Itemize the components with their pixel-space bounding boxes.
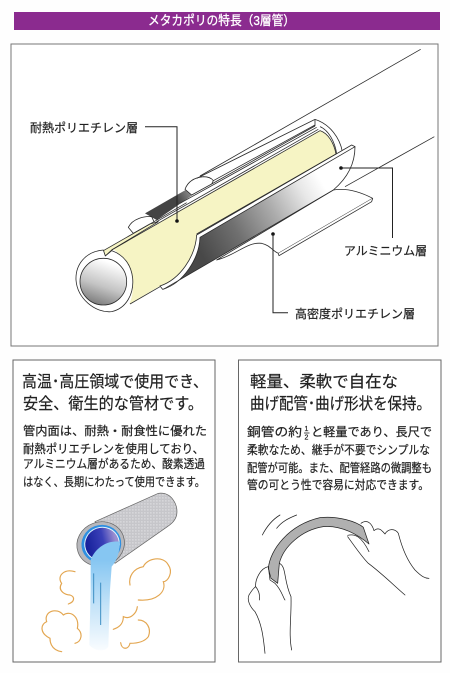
body text: 1 bbox=[304, 426, 308, 433]
body text: 柔軟なため、継手が不要でシンプルな bbox=[247, 442, 430, 457]
label: aluminium layer bbox=[339, 166, 427, 258]
label: high-density polyethylene layer bbox=[271, 232, 415, 321]
panel: high temperature and pressure bbox=[13, 360, 215, 662]
body text bbox=[23, 423, 207, 489]
body text: はなく、長期にわたって使用できます。 bbox=[23, 474, 205, 489]
body text: 銅管の約 bbox=[247, 424, 302, 439]
heading: 曲げ配管･曲げ形状を保持。 bbox=[250, 395, 431, 413]
label: aluminium layer: アルミニウム層 bbox=[344, 244, 427, 258]
label: heat-resistant polyethylene layer: 耐熱ポリエチレン層 bbox=[30, 121, 138, 135]
heading bbox=[250, 373, 431, 413]
body text: 管内面は、耐熱・耐食性に優れた bbox=[23, 423, 207, 438]
heading: 高温･高圧領域で使用でき、 bbox=[22, 373, 208, 391]
body text: 2 bbox=[304, 434, 308, 442]
label: high-density polyethylene layer: 高密度ポリエチレン層 bbox=[295, 307, 415, 321]
heading bbox=[22, 373, 208, 413]
panel: lightweight and flexible bbox=[238, 360, 441, 662]
panel: three-layer pipe cutaway bbox=[11, 44, 438, 346]
body text: と軽量であり、長尺で bbox=[311, 425, 432, 439]
heading: 安全、衛生的な管材です。 bbox=[23, 395, 203, 413]
body text bbox=[247, 424, 432, 492]
label: heat-resistant polyethylene layer bbox=[30, 121, 179, 223]
heading: 軽量、柔軟で自在な bbox=[250, 373, 398, 391]
pipe cutaway illustration bbox=[76, 49, 434, 312]
illustration: pipe pouring water with steam bbox=[42, 493, 177, 652]
body text: アルミニウム層があるため、酸素透過 bbox=[23, 456, 205, 471]
illustration: hands bending pipe bbox=[248, 515, 429, 653]
title bar bbox=[14, 12, 440, 30]
body text: 耐熱ポリエチレンを使用しており、 bbox=[23, 441, 204, 456]
body text: 管の可とう性で容易に対応できます。 bbox=[247, 477, 429, 492]
title bar: メタカポリの特長（3層管） bbox=[148, 13, 295, 28]
